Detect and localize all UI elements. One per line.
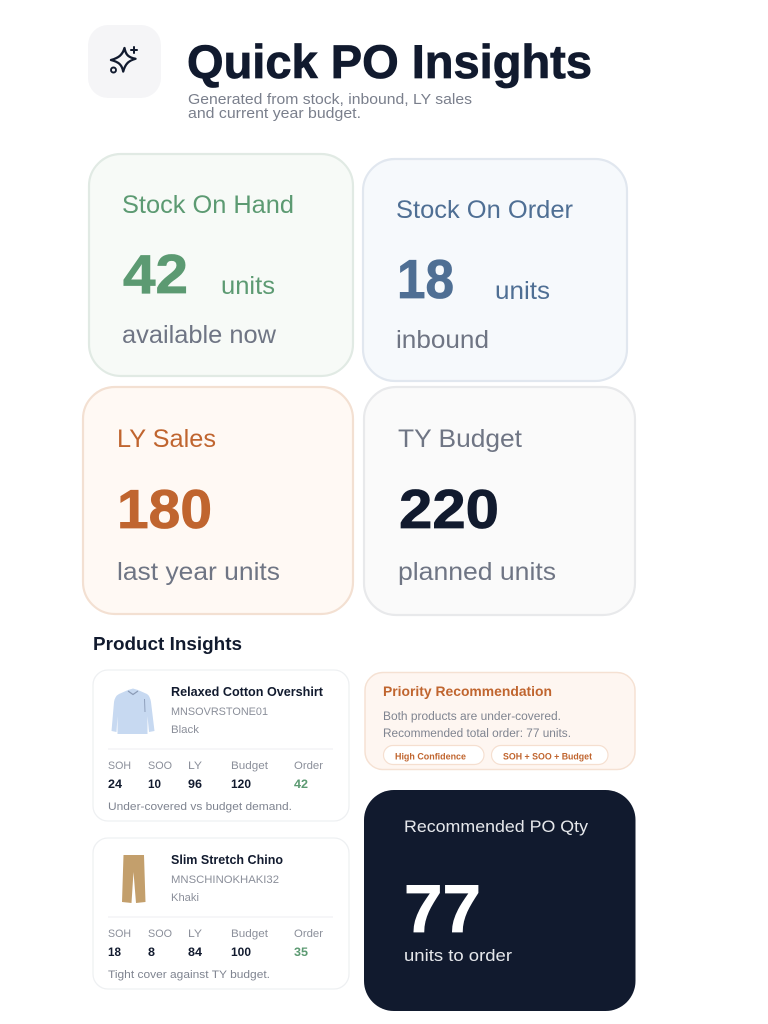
- panel: TY budget: planned units: [398, 558, 556, 586]
- panel: product overshirt: Black: [171, 724, 200, 736]
- panel: stock on order: 18: [397, 248, 454, 310]
- stats: Order: [294, 928, 323, 940]
- stats: Budget: [231, 928, 268, 940]
- stats: LY: [188, 928, 203, 940]
- stats: [108, 928, 323, 959]
- icon: shirt: [112, 688, 154, 734]
- panel: recommended PO qty: [364, 790, 636, 1011]
- panel: product chino: Khaki: [171, 892, 199, 904]
- panel: recommended PO qty: Recommended PO Qty: [404, 817, 589, 836]
- subtitle: Generated from stock, inbound, LY sales: [188, 92, 472, 108]
- panel: LY sales: 180: [117, 478, 212, 540]
- stats: 24: [108, 779, 123, 791]
- stats: 84: [188, 947, 203, 959]
- stats: 10: [148, 779, 161, 791]
- panel: stock on order: units: [495, 277, 550, 305]
- stats: Order: [294, 760, 323, 772]
- stats: SOO: [148, 760, 172, 772]
- badge: formula: SOH + SOO + Budget: [503, 752, 593, 762]
- panel: product chino: MNSCHINOKHAKI32: [171, 874, 279, 886]
- badge: formula: [492, 746, 608, 764]
- stats: LY: [188, 760, 203, 772]
- icon: trousers: [122, 855, 146, 903]
- panel: stock on hand: Stock On Hand: [122, 191, 294, 219]
- stats: 100: [231, 947, 251, 959]
- stats: SOH: [108, 928, 131, 940]
- panel: stock on order: Stock On Order: [396, 196, 573, 224]
- panel: recommended PO qty: 77: [404, 871, 481, 947]
- panel: product chino: Tight cover against TY budget.: [108, 969, 270, 981]
- panel: priority recommendation: Recommended total order: 77 units.: [383, 728, 571, 740]
- panel: product overshirt: Relaxed Cotton Overshirt: [171, 685, 324, 699]
- panel: priority recommendation: [365, 672, 635, 770]
- panel: TY budget: TY Budget: [398, 425, 522, 453]
- stats: 35: [294, 947, 309, 959]
- stats: 42: [294, 779, 308, 791]
- stats: 18: [108, 947, 122, 959]
- subtitle: [188, 92, 472, 122]
- icon: sparkle: [88, 25, 161, 98]
- badge: high confidence: [384, 746, 484, 764]
- panel: stock on order: [363, 159, 627, 381]
- heading: product insights: Product Insights: [93, 634, 242, 654]
- panel: stock on hand: available now: [122, 321, 277, 349]
- stats: Budget: [231, 760, 268, 772]
- panel: stock on order: inbound: [396, 326, 489, 354]
- panel: product overshirt: MNSOVRSTONE01: [171, 706, 268, 718]
- stats: SOO: [148, 928, 172, 940]
- panel: priority recommendation: Both products are under-covered.: [383, 711, 561, 723]
- stats: 96: [188, 779, 202, 791]
- panel: stock on hand: units: [221, 272, 275, 300]
- panel: product overshirt: [93, 670, 349, 821]
- panel: stock on hand: 42: [123, 243, 188, 305]
- stats: [108, 760, 323, 791]
- panel: product chino: [93, 838, 349, 989]
- panel: LY sales: LY Sales: [117, 425, 216, 453]
- header: [88, 25, 592, 122]
- panel: LY sales: last year units: [117, 558, 280, 586]
- subtitle: and current year budget.: [188, 106, 361, 122]
- panel: recommended PO qty: units to order: [404, 946, 512, 965]
- title: Quick PO Insights: [187, 35, 592, 88]
- stats: 8: [148, 947, 156, 959]
- panel: TY budget: [364, 387, 635, 615]
- stats: SOH: [108, 760, 131, 772]
- panel: product chino: Slim Stretch Chino: [171, 853, 283, 867]
- badge: high confidence: High Confidence: [395, 752, 466, 762]
- panel: LY sales: [83, 387, 353, 614]
- panel: stock on hand: [89, 154, 353, 376]
- panel: product overshirt: Under-covered vs budget demand.: [108, 801, 292, 813]
- stats: 120: [231, 779, 251, 791]
- panel: priority recommendation: Priority Recommendation: [383, 683, 552, 699]
- panel: TY budget: 220: [399, 478, 499, 540]
